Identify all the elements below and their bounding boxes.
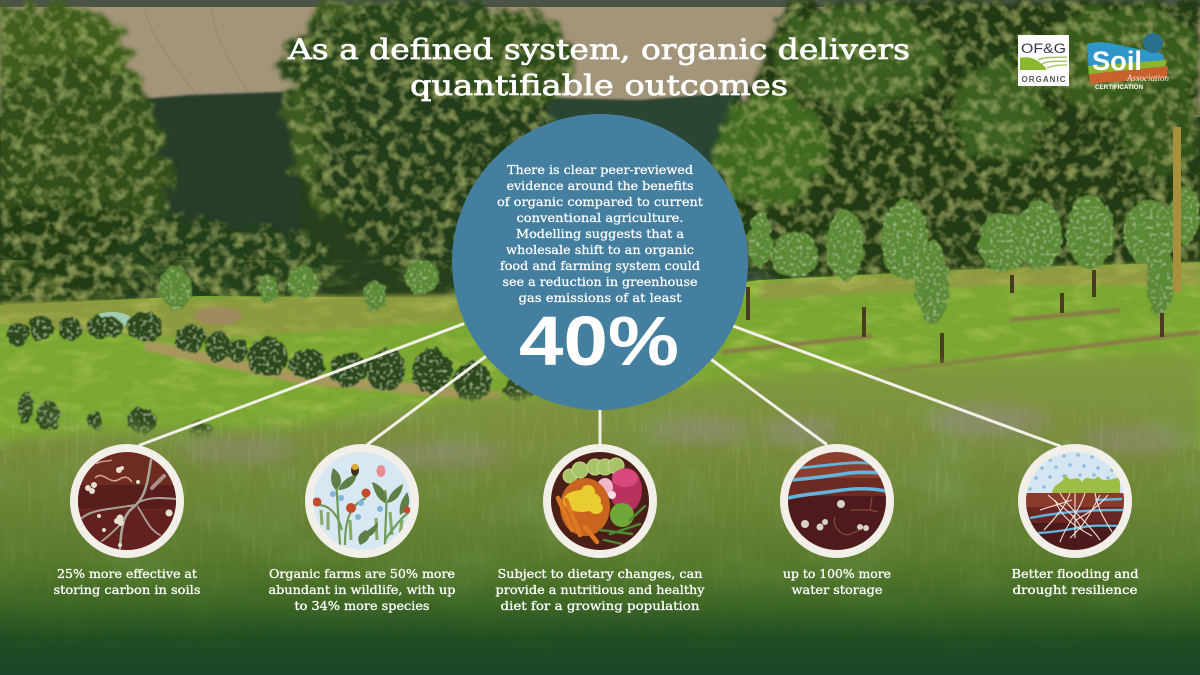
purple flower haze: [185, 404, 1180, 465]
logo: Soil Association Certification: Association: [1126, 73, 1169, 83]
icon: water storage in soil: [780, 444, 894, 558]
logo: Soil Association Certification: CERTIFICATION: [1095, 85, 1143, 91]
caption: carbon: [54, 566, 200, 597]
icon: wildlife and flowers: [305, 444, 419, 558]
icon: nutritious food bowl: [543, 444, 657, 558]
distant tan fields: [0, 0, 1200, 117]
wildflower meadow: [0, 352, 1200, 675]
caption: diet: [496, 566, 705, 613]
title: As a defined system, organic delivers: [287, 33, 910, 66]
sapling stakes: [748, 270, 1162, 363]
callout text: of organic compared to current: [497, 194, 703, 209]
callout text: evidence around the benefits: [506, 178, 694, 193]
icon: flooding and drought resilience: [1018, 444, 1132, 558]
caption: carbon: storing carbon in soils: [54, 582, 200, 597]
caption: water storage: [783, 566, 891, 597]
tent mound: [92, 312, 132, 328]
central tree: [285, 0, 570, 270]
caption: wildlife: Organic farms are 50% more: [269, 566, 455, 581]
connector lines from hub to outcome circles: [140, 324, 1060, 446]
paths in field: [145, 345, 500, 397]
callout text: [497, 162, 703, 305]
title: quantifiable outcomes: [410, 69, 788, 102]
caption: water storage: water storage: [792, 582, 882, 597]
logo: OF&G Organic: ORGANIC: [1022, 75, 1066, 84]
callout text: gas emissions of at least: [518, 290, 682, 305]
right trees: [715, 0, 1200, 275]
distant dark forest: [130, 90, 780, 300]
caption: water storage: up to 100% more: [783, 566, 891, 581]
caption: diet: diet for a growing population: [500, 598, 700, 613]
caption: carbon: 25% more effective at: [57, 566, 197, 581]
fence post: [1173, 127, 1181, 292]
callout text: conventional agriculture.: [516, 210, 684, 225]
logo: Soil Association Certification: Soil: [1092, 46, 1142, 76]
logo: Soil Association Certification: [1087, 33, 1169, 91]
straw heap: [194, 307, 242, 325]
title: [287, 33, 910, 102]
caption: diet: Subject to dietary changes, can: [498, 566, 702, 581]
caption: resilience: drought resilience: [1012, 582, 1138, 597]
callout text: There is clear peer-reviewed: [507, 162, 693, 177]
logo: OF&G Organic: OF&G: [1021, 41, 1066, 56]
caption: resilience: [1012, 566, 1138, 597]
callout text: wholesale shift to an organic: [506, 242, 694, 257]
caption: diet: provide a nutritious and healthy: [496, 582, 705, 597]
icon: carbon in soil: [70, 444, 184, 558]
caption: wildlife: to 34% more species: [294, 598, 430, 613]
logo: OF&G Organic: [1018, 35, 1069, 86]
caption: wildlife: [268, 566, 456, 613]
hedge row and orchard saplings: [7, 187, 1200, 442]
green field behind and around orchard: [0, 262, 1200, 675]
callout text: Modelling suggests that a: [516, 226, 685, 241]
key figure: 40%: 40%: [519, 302, 679, 380]
left tree: [0, 0, 335, 313]
caption: wildlife: abundant in wildlife, with up: [268, 582, 456, 597]
callout text: see a reduction in greenhouse: [502, 274, 698, 289]
callout text: food and farming system could: [500, 258, 700, 273]
central callout circle: [452, 114, 748, 410]
caption: resilience: Better flooding and: [1012, 566, 1138, 581]
